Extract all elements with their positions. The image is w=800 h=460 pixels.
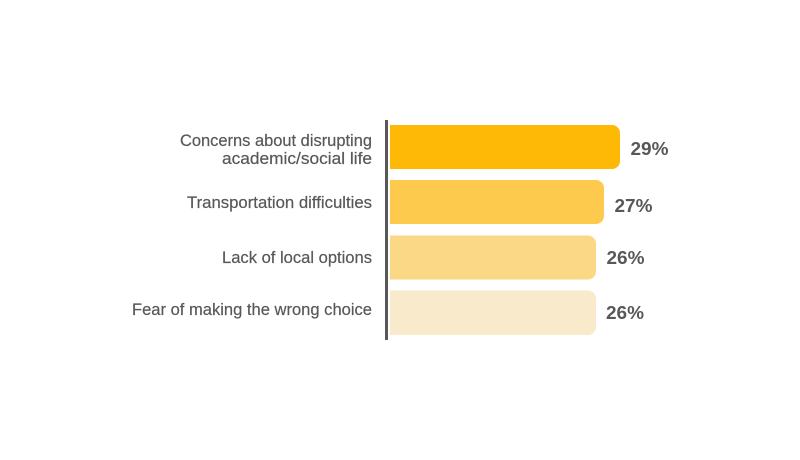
bar: 26% local options	[390, 236, 596, 280]
value: 29%: 29%	[630, 139, 668, 159]
label: transportation difficulties: Transportation difficulties	[187, 194, 372, 212]
value: 27%: 27%	[614, 196, 652, 216]
vertical axis	[385, 120, 388, 340]
label: fear of making the wrong choice: Fear of making the wrong choice	[132, 301, 372, 319]
value: 26% local options: 26%	[606, 248, 644, 268]
value: 26% wrong choice: 26%	[606, 303, 644, 323]
label: concerns about disrupting academic/social life: academic/social life	[222, 150, 372, 168]
bar: 29%	[390, 125, 620, 169]
label: concerns about disrupting academic/social life: Concerns about disrupting	[180, 132, 372, 150]
label: lack of local options: Lack of local options	[222, 249, 372, 267]
bar: 27%	[390, 180, 604, 224]
label: concerns about disrupting academic/social life	[180, 132, 372, 168]
bar: 26% wrong choice	[390, 290, 596, 335]
